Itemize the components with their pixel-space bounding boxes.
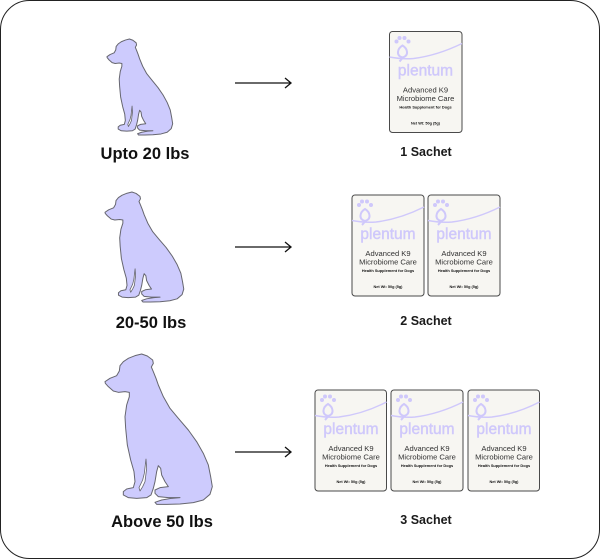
sachet: row 2 left: Advanced K9 [365,249,411,258]
sachet: row 3 right [468,390,540,491]
sachet: row 1: plentum [398,62,453,80]
icon: medium dog silhouette [105,192,184,302]
sachet: row 3 left [315,390,386,491]
sachet: row 2 right: Microbiome Care [435,258,493,266]
sachet: row 2 right: Net Wt: 50g (5g) [450,285,479,289]
sachet: row 3 left: plentum [323,421,379,438]
sachet: row 3 right: plentum [476,421,532,438]
sachet: row 1: Microbiome Care [397,94,454,103]
sachet: row 2 left: Microbiome Care [359,258,417,266]
sachet: row 3 left: Net Wt: 50g (5g) [337,480,366,484]
sachet: row 1 [390,32,462,132]
label: Above 50 lbs: Above 50 lbs [111,513,213,531]
sachet: row 3 middle: Net Wt: 50g (5g) [413,480,442,484]
icon: large dog silhouette [105,354,212,504]
label: 2 Sachet: 2 Sachet [400,314,453,328]
sachet: row 1: Health Supplement for Dogs [399,104,452,110]
sachet: row 3 middle: plentum [399,421,455,438]
sachet: row 3 left: Microbiome Care [322,452,380,462]
sachet: row 3 right: Net Wt: 50g (5g) [490,480,519,484]
sachet: row 3 right: Advanced K9 [481,444,527,453]
sachet: row 3 right: Health Supplement for Dogs [478,463,530,468]
sachet: row 2 right: Health Supplement for Dogs [438,268,490,273]
sachet: row 3 middle: Advanced K9 [404,444,450,453]
arrow: row 1 [235,78,291,88]
arrow: row 2 [235,242,291,252]
sachet: row 1: Net Wt: 50g (5g) [411,122,441,126]
sachet: row 3 right: Microbiome Care [475,452,533,462]
sachet: row 2 left: Health Supplement for Dogs [362,268,414,273]
sachet: row 1: Advanced K9 [403,86,448,94]
sachet: row 3 middle [391,390,463,491]
label: Upto 20 lbs: Upto 20 lbs [101,145,189,163]
sachet: row 2 left [352,195,424,296]
label: 3 Sachet: 3 Sachet [400,513,453,527]
sachet: row 2 right: Advanced K9 [441,249,487,258]
sachet: row 2 right: plentum [436,226,492,243]
icon: small dog silhouette [107,39,173,135]
arrow: row 3 [235,447,291,457]
sachet: row 3 middle: Microbiome Care [398,452,456,462]
sachet: row 3 left: Advanced K9 [328,444,374,453]
label: 20-50 lbs: 20-50 lbs [116,314,186,332]
sachet: row 2 left: Net Wt: 50g (5g) [374,285,403,289]
sachet: row 3 left: Health Supplement for Dogs [325,463,377,468]
sachet: row 2 left: plentum [360,226,416,243]
sachet: row 3 middle: Health Supplement for Dogs [401,463,453,468]
sachet: row 2 right [428,195,500,296]
label: 1 Sachet: 1 Sachet [400,145,453,159]
